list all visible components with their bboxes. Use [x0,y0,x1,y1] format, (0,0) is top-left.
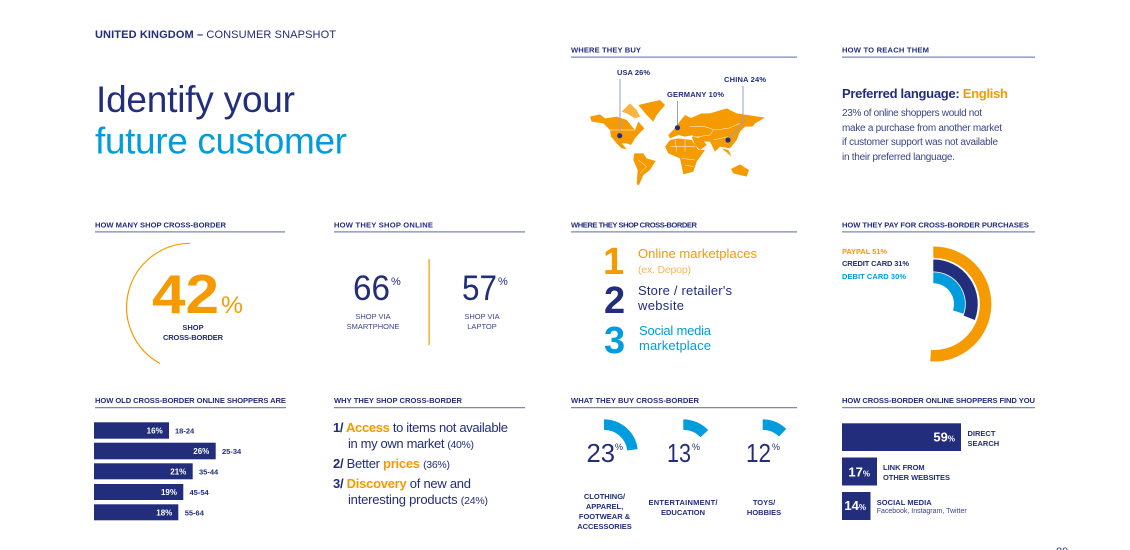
heading: where they buy: WHERE THEY BUY [571,46,641,54]
category: entertainment [648,425,718,517]
category: toys: % [772,442,780,452]
heading: where they shop: WHERE THEY SHOP CROSS-BORDER [571,220,698,230]
heading: what they buy: WHAT THEY BUY CROSS-BORDER [571,396,700,405]
rank 1 [603,241,758,283]
panel: why they shop cross-border [333,396,525,507]
heading: how old: HOW OLD CROSS-BORDER ONLINE SHOPPERS ARE [95,396,286,405]
map callout: USA: USA 26% [617,68,650,77]
legend [842,247,909,281]
rank 1: 1 [603,241,624,283]
bar chart: age groups: 18% [156,508,172,518]
stat label: SHOP [182,323,204,332]
bar chart: age groups: 45-54 [190,488,210,497]
category: toys: TOYS/ [753,498,776,507]
bar: link from other websites: OTHER WEBSITES [883,473,950,482]
stat: smartphone: % [391,276,401,288]
heading: how they pay: HOW THEY PAY FOR CROSS-BORDER PURCHASES [842,220,1029,230]
rank 3: 3 [604,320,625,362]
category: toys: 12 [746,438,771,468]
stat: laptop: LAPTOP [467,322,497,331]
bar: direct search: SEARCH [968,439,999,448]
bar: link from other websites [842,458,950,486]
preferred language: Preferred language: English [842,86,1008,101]
stat: 42 percent [152,263,243,325]
category: clothing: APPAREL, [586,502,623,511]
rank 2: website [637,298,684,313]
stat: 42 percent: 42 [152,263,219,325]
language text block: in their preferred language. [842,152,955,163]
category: entertainment: EDUCATION [661,508,705,517]
category: entertainment: ENTERTAINMENT/ [648,498,718,507]
bar chart: age groups: 55-64 [185,508,205,518]
stat: laptop [462,269,508,331]
reason 1: 1/ Access to items not available [333,420,508,435]
category: clothing [577,425,632,531]
bar: link from other websites: LINK FROM [883,463,925,472]
panel: what they buy [571,396,797,531]
heading: how shoppers find you: HOW CROSS-BORDER ONLINE SHOPPERS FIND YOU [842,396,1036,405]
category: clothing: ACCESSORIES [577,522,632,531]
reason 2: 2/ Better prices (36%) [333,456,450,471]
stat: laptop: SHOP VIA [464,312,500,321]
panel: how shoppers find you [842,396,1036,520]
rank 2 [604,280,732,322]
panel: how to reach them [842,46,1035,163]
bar: social media [842,492,967,520]
world map [590,100,765,185]
bar: direct search [842,423,999,451]
legend: DEBIT CARD 30% [842,272,906,281]
rank 1: Online marketplaces [638,246,758,261]
progress arc [127,243,190,364]
bar chart: age groups: 35-44 [199,468,219,476]
bar chart: age groups: 25-34 [222,447,242,456]
panel: where they shop cross-border [571,220,797,362]
category: clothing: CLOTHING/ [584,492,626,501]
rank 2: Store / retailer's [638,283,732,298]
bar chart: age groups: 16% [147,426,163,436]
heading: how to reach them: HOW TO REACH THEM [842,46,929,54]
reason 3: 3/ Discovery of new and [333,476,471,491]
map callout: China [724,75,766,143]
reason 1: in my own market (40%) [348,436,474,451]
category: entertainment: 13 [667,438,691,468]
rank 3 [604,320,712,362]
reason 3 [333,476,488,507]
heading: how they shop online: HOW THEY SHOP ONLINE [334,220,433,230]
stat: smartphone [347,269,401,331]
stat label [163,323,224,342]
category: entertainment: % [692,442,700,452]
category: toys [746,425,783,517]
category: clothing: FOOTWEAR & [579,512,631,521]
category: toys: HOBBIES [747,508,781,517]
stat: laptop: 57 [462,269,497,308]
title: Identify your [96,79,295,120]
divider: orange [428,259,430,345]
stat label: CROSS-BORDER [163,333,224,342]
rank 3: Social media [639,323,712,338]
heading: why they shop: WHY THEY SHOP CROSS-BORDER [334,396,463,405]
bar chart: age groups [94,422,242,520]
language text block [842,108,1002,163]
stat: smartphone: SMARTPHONE [347,322,399,331]
category: clothing: 23 [586,438,615,468]
rank 2: 2 [604,280,625,322]
bar chart: age groups: 19% [161,488,177,497]
map callout: Germany [667,90,724,130]
reason 3: interesting products (24%) [348,492,488,507]
panel: where they buy [571,46,797,185]
stat: laptop: % [498,276,508,288]
bar: direct search: DIRECT [968,429,996,438]
category: clothing: % [615,442,623,452]
map callout: China: CHINA 24% [724,75,766,84]
language text block: 23% of online shoppers would not [842,108,982,119]
title [95,79,347,162]
stat: smartphone: 66 [353,269,390,308]
bar: social media: SOCIAL MEDIA [877,498,932,507]
panel: how old [94,396,286,520]
bar: social media: Facebook, Instagram, Twitter [877,508,967,515]
map callout: Germany: GERMANY 10% [667,90,724,99]
bar chart: age groups: 21% [170,468,186,476]
bar: social media: 14% [844,498,866,513]
bar chart: age groups: 18-24 [175,426,195,436]
map callout: USA [617,68,650,138]
language text block: if customer support was not available [842,137,998,148]
panel: how they shop online [334,220,525,345]
bar chart: age groups: 26% [193,447,209,456]
panel: how many shop cross-border [95,220,285,364]
legend: CREDIT CARD 31% [842,259,909,268]
eyebrow: United Kingdom consumer snapshot: UNITED KINGDOM – CONSUMER SNAPSHOT [95,29,336,41]
bar: direct search: 59% [933,430,955,445]
stat: smartphone: SHOP VIA [355,312,391,321]
rank 3: marketplace [639,338,711,353]
title: future customer [95,120,347,162]
legend: PAYPAL 51% [842,247,887,256]
radial bar chart [931,252,986,356]
panel: how they pay [842,220,1035,356]
bar: link from other websites: 17% [848,464,870,480]
language text block: make a purchase from another market [842,123,1002,134]
heading: how many shop: HOW MANY SHOP CROSS-BORDER [95,220,227,230]
reason 1 [333,420,508,451]
stat: 42 percent: % [221,292,243,319]
rank 1: (ex. Depop) [638,264,691,276]
